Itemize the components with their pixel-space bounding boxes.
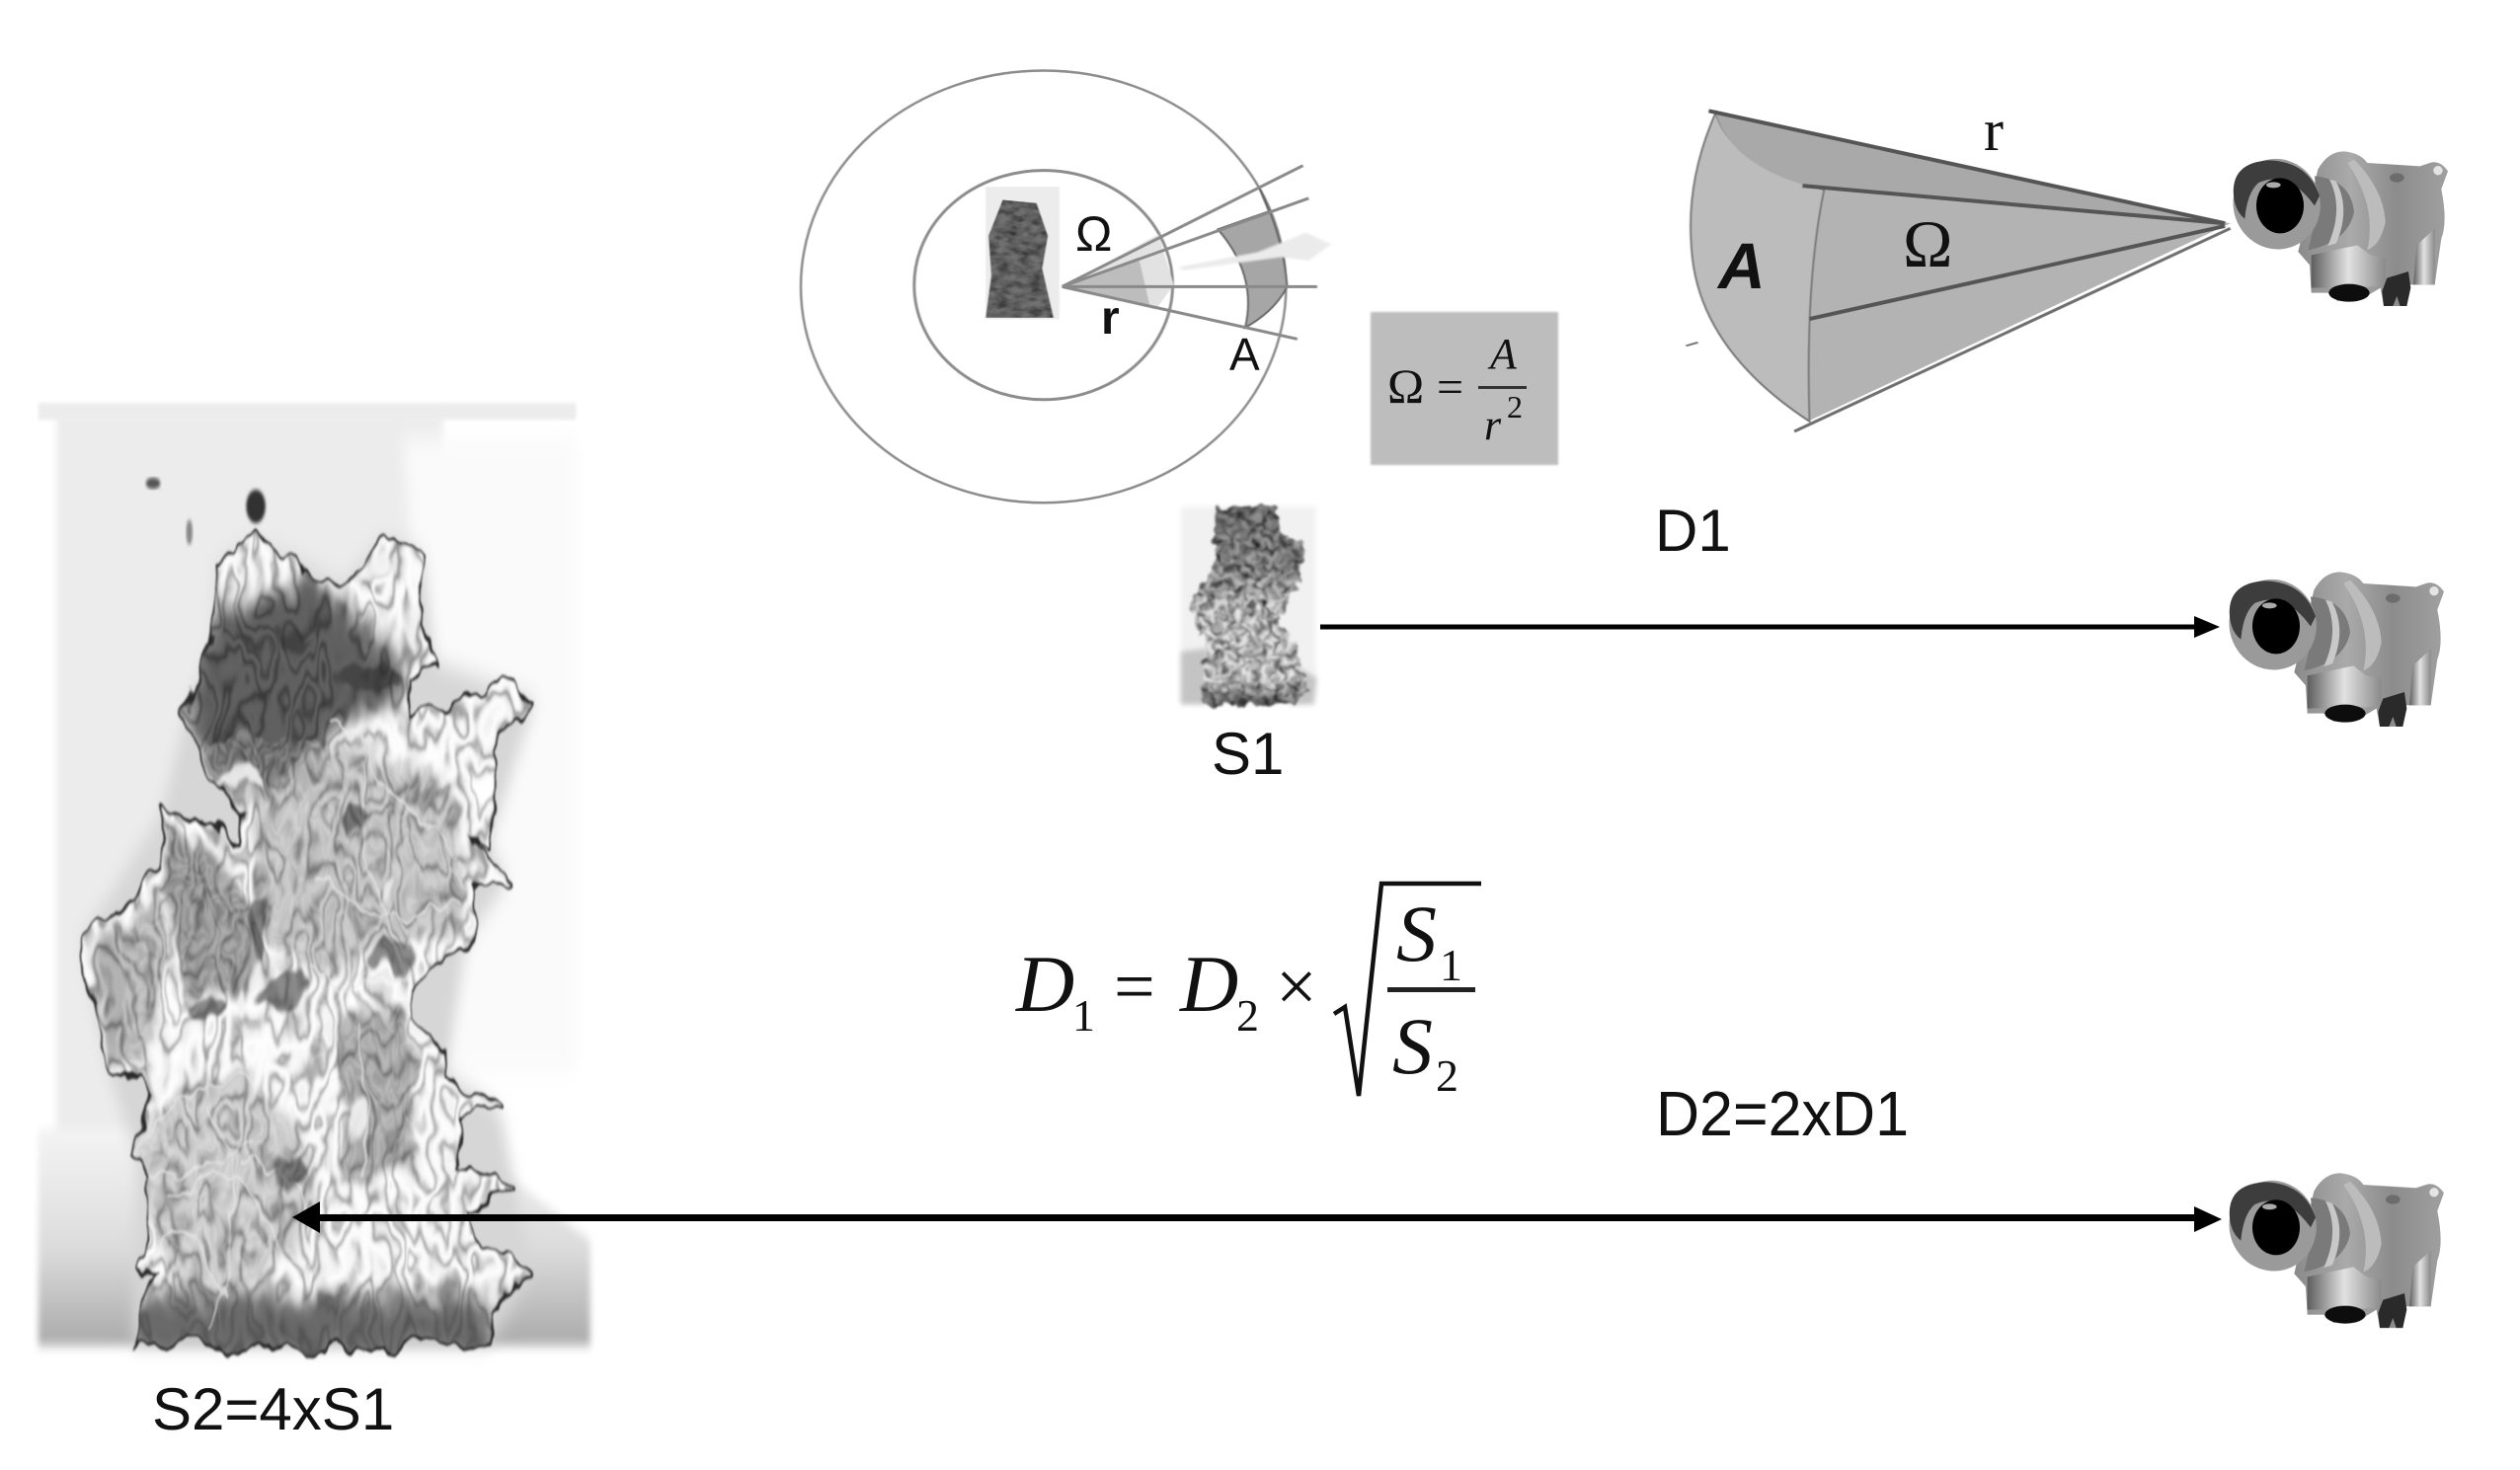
formula: D1 = D2 x sqrt(S1/S2): = bbox=[1114, 947, 1155, 1028]
formula: D1 = D2 x sqrt(S1/S2): × bbox=[1276, 947, 1317, 1028]
label: D2=2xD1: D2=2xD1 bbox=[1656, 1078, 1909, 1149]
A label: A bbox=[1229, 329, 1260, 380]
panel: large flame S2 bbox=[39, 403, 591, 1359]
label: S1: S1 bbox=[1212, 721, 1284, 787]
formula box: omega = A / r^2: = bbox=[1437, 361, 1463, 414]
omega label: Ω bbox=[1075, 206, 1112, 262]
icon: small flame S1 bbox=[1181, 503, 1316, 708]
formula box: omega = A / r^2 bbox=[1371, 312, 1558, 465]
formula: D1 = D2 x sqrt(S1/S2): 2 bbox=[1436, 1050, 1458, 1101]
cone label r: r bbox=[1984, 98, 2004, 163]
label: D1: D1 bbox=[1655, 498, 1731, 564]
cone label A: A bbox=[1716, 229, 1766, 302]
cone label omega: Ω bbox=[1903, 206, 1953, 281]
inner circle bbox=[914, 171, 1173, 400]
arrow: S1 to detector bbox=[1320, 616, 2220, 638]
icon: detector camera 2 bbox=[2218, 568, 2444, 727]
area patch A bbox=[1218, 187, 1287, 328]
formula box: omega = A / r^2: Ω bbox=[1387, 358, 1424, 414]
faint arrow bbox=[1178, 233, 1331, 271]
panel: cone to detector bbox=[1686, 98, 2231, 431]
outer circle bbox=[801, 71, 1286, 503]
formula: D1 = D2 x sqrt(S1/S2): D bbox=[1179, 939, 1238, 1029]
formula: D1 = D2 x sqrt(S1/S2): D bbox=[1015, 939, 1074, 1029]
formula: D1 = D2 x sqrt(S1/S2) bbox=[1015, 884, 1481, 1101]
formula box: omega = A / r^2: r bbox=[1484, 401, 1502, 449]
icon: detector camera 3 bbox=[2218, 1169, 2444, 1328]
label: S2=4xS1: S2=4xS1 bbox=[152, 1376, 394, 1442]
r label: r bbox=[1101, 292, 1120, 345]
icon: detector camera 1 bbox=[2222, 147, 2448, 306]
arrow: double-headed S2 to detector bbox=[292, 1201, 2222, 1233]
wedge bbox=[1063, 234, 1174, 310]
formula: D1 = D2 x sqrt(S1/S2): 1 bbox=[1440, 940, 1462, 990]
small flame in circle bbox=[985, 187, 1060, 320]
formula: D1 = D2 x sqrt(S1/S2): S bbox=[1392, 1001, 1433, 1091]
cone rays bbox=[1063, 166, 1317, 339]
formula: D1 = D2 x sqrt(S1/S2): S bbox=[1396, 889, 1437, 978]
formula: D1 = D2 x sqrt(S1/S2): 2 bbox=[1236, 990, 1259, 1041]
formula box: omega = A / r^2: 2 bbox=[1507, 389, 1523, 425]
formula: D1 = D2 x sqrt(S1/S2): 1 bbox=[1072, 990, 1095, 1041]
formula box: omega = A / r^2: A bbox=[1487, 330, 1518, 378]
panel: solid angle circles diagram bbox=[801, 71, 1331, 503]
